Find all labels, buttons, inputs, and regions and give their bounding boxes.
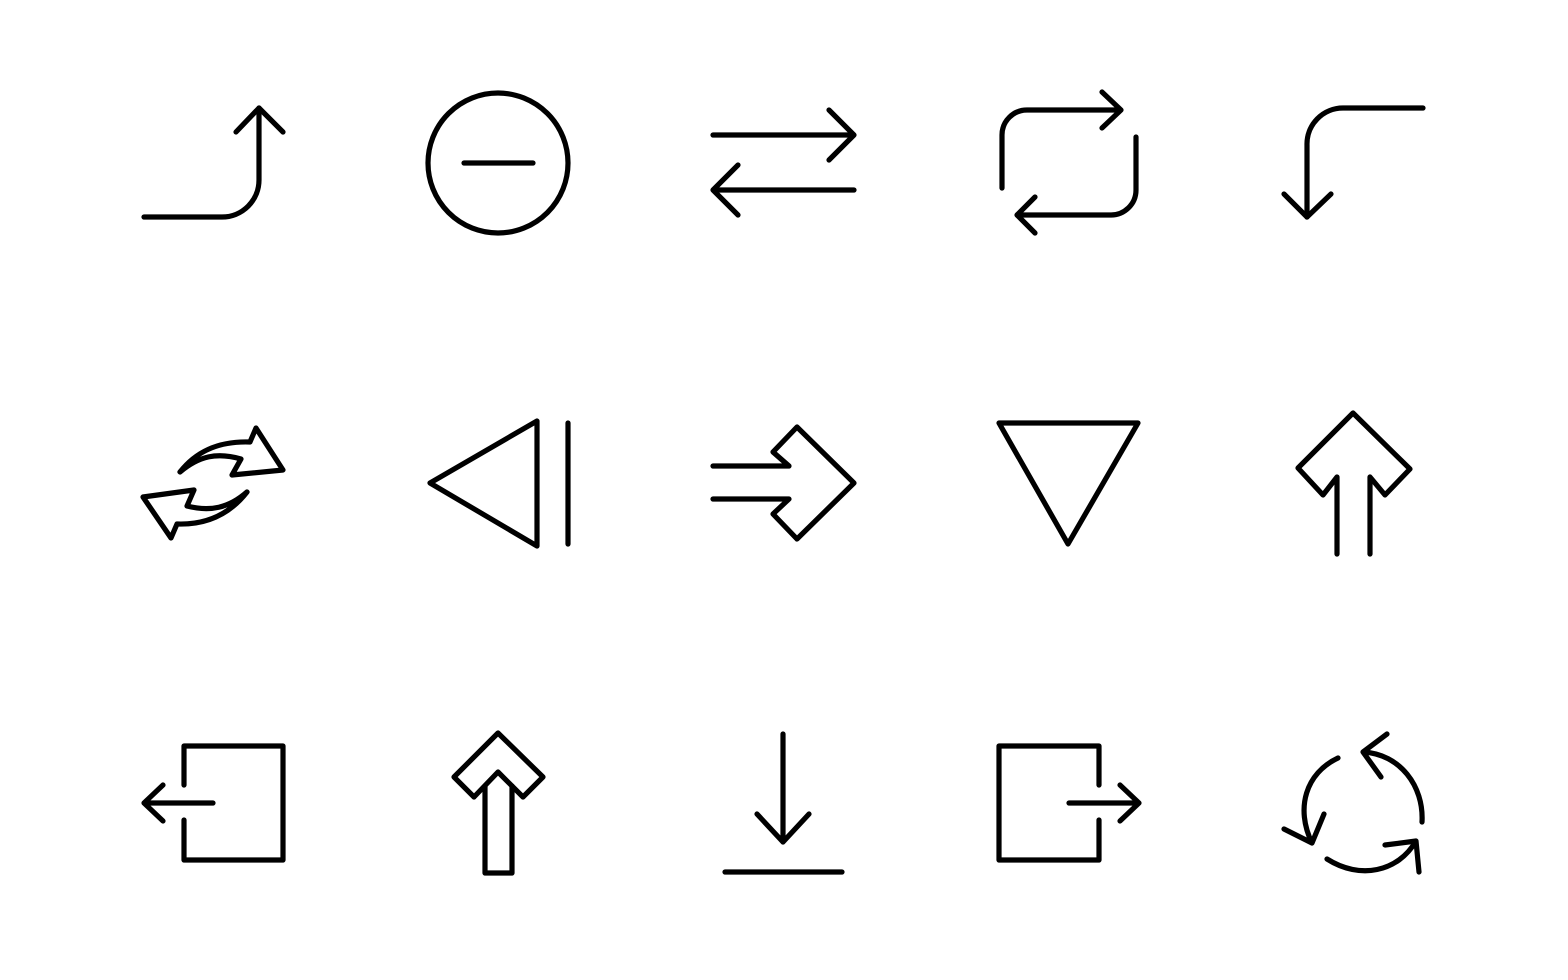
icon: download arrow over line <box>725 734 842 872</box>
icon: repeat loop arrows <box>1002 92 1136 233</box>
icon: hollow up arrow <box>454 733 543 873</box>
icon: skip back triangle with bar <box>430 421 568 546</box>
icon: two curved exchange arrows <box>143 428 283 538</box>
icon: circular three arrows <box>1284 734 1422 872</box>
icon: enter box left arrow <box>144 746 283 860</box>
icon: double-line right arrow <box>713 427 854 539</box>
icon: right then up turn arrow <box>144 108 283 217</box>
icon: left then down turn arrow <box>1284 108 1423 217</box>
icon: exit box right arrow <box>999 746 1139 860</box>
icon: double-line up arrow <box>1298 413 1410 554</box>
icon: down pointing triangle <box>999 423 1138 544</box>
icon: opposing swap arrows <box>713 110 854 215</box>
icon: minus in circle <box>428 93 568 233</box>
